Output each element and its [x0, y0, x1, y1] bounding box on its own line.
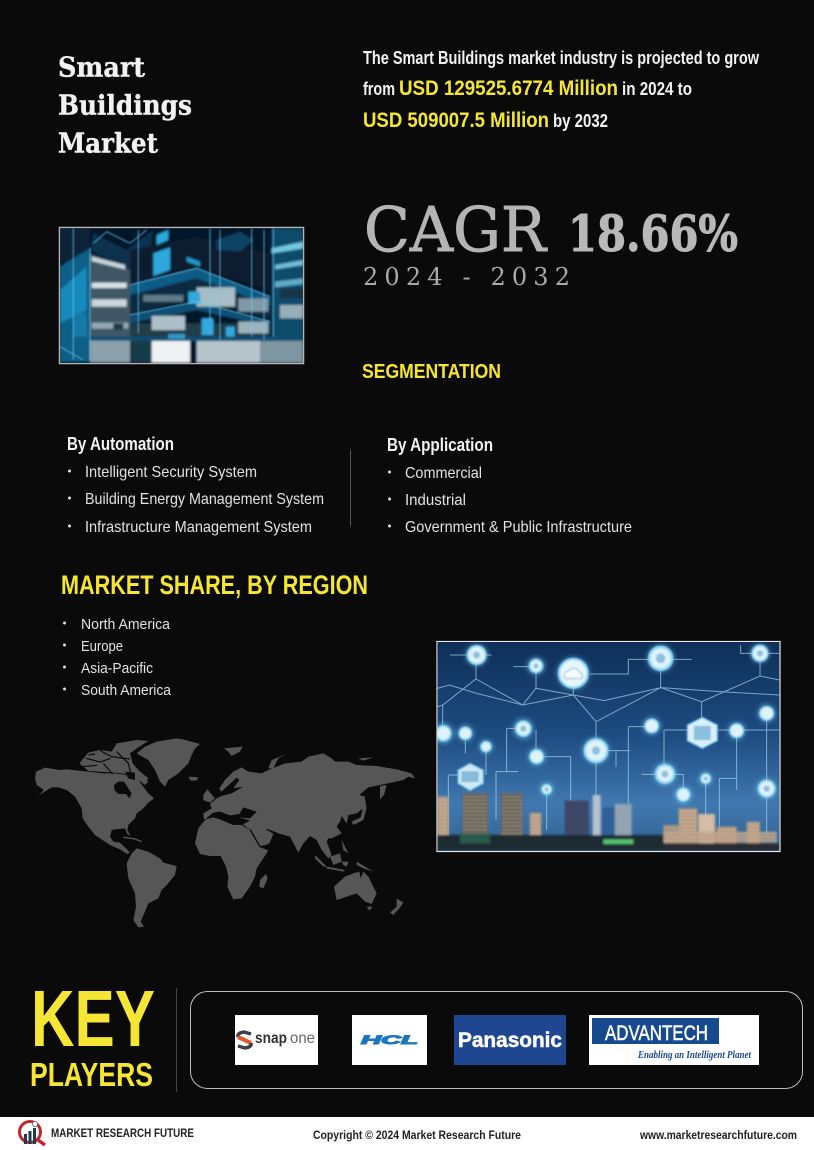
title: Smart	[58, 52, 145, 84]
region list	[63, 616, 172, 699]
heading: market share by region: MARKET SHARE, BY REGION	[61, 570, 368, 600]
CAGR figure	[363, 193, 738, 291]
segment list: by automation: Building Energy Management System	[85, 491, 324, 508]
image: smart building	[60, 228, 304, 364]
canadian arctic islands	[79, 740, 148, 783]
logo: snap one: snap	[255, 1030, 287, 1047]
heading: segmentation: SEGMENTATION	[362, 361, 501, 383]
south america	[127, 848, 177, 927]
africa	[195, 817, 268, 899]
region list: Europe	[81, 638, 123, 655]
caribbean islands	[123, 837, 142, 842]
CAGR figure: CAGR	[364, 193, 548, 266]
projection text block: in 2024 to	[622, 79, 692, 99]
asian islands	[203, 747, 403, 915]
CAGR figure: 18.66%	[568, 204, 738, 263]
key players heading: KEY	[31, 974, 155, 1063]
projection text block: from	[363, 79, 395, 99]
segment list: by automation: By Automation	[67, 434, 174, 454]
greenland	[137, 738, 200, 787]
logo: hcl: HCL	[361, 1035, 418, 1047]
logo: snap one: one	[290, 1030, 315, 1047]
segment list: by automation: Infrastructure Management System	[85, 519, 312, 536]
region list: North America	[81, 616, 171, 633]
logo: snap one	[235, 1015, 318, 1065]
footer copyright: Copyright © 2024 Market Research Future	[313, 1128, 521, 1142]
logo: advantech: Enabling an Intelligent Planet	[637, 1050, 752, 1061]
logo: panasonic	[454, 1015, 566, 1065]
footer brand: MARKET RESEARCH FUTURE	[51, 1126, 194, 1140]
mediterranean and black sea	[205, 807, 257, 825]
logo: panasonic: Panasonic	[458, 1029, 562, 1052]
arctic channels	[82, 751, 131, 774]
iceland	[188, 777, 198, 781]
segment list: by application: Commercial	[405, 465, 482, 482]
logo: advantech: ADVANTECH	[605, 1022, 708, 1045]
old world	[195, 747, 415, 915]
north america	[35, 768, 154, 854]
projection text block: USD 129525.6774 Million	[399, 77, 618, 100]
region list: South America	[81, 682, 172, 699]
key players heading	[30, 974, 155, 1093]
title: Buildings	[58, 90, 192, 122]
segment list: by automation	[67, 434, 324, 536]
projection text block	[363, 48, 760, 132]
projection text block: by 2032	[553, 111, 608, 131]
world map	[35, 738, 415, 927]
CAGR figure: 2024 - 2032	[363, 263, 570, 291]
hudson bay	[114, 772, 135, 798]
title	[58, 52, 192, 160]
footer bar	[0, 1117, 814, 1150]
segment list: by automation: Intelligent Security System	[85, 464, 257, 481]
segment list: by application: Industrial	[405, 492, 466, 509]
key players panel	[190, 992, 802, 1088]
segment list: by application	[387, 435, 632, 536]
logo: hcl	[352, 1015, 427, 1065]
title: Market	[58, 128, 158, 160]
logo: advantech	[589, 1015, 759, 1065]
key players heading: PLAYERS	[30, 1056, 153, 1093]
image: connected city network	[433, 642, 780, 852]
eurasia	[203, 753, 415, 858]
region list: Asia-Pacific	[81, 660, 153, 677]
footer logo icon	[20, 1122, 45, 1145]
segment list: by application: By Application	[387, 435, 493, 455]
baltic sea	[221, 778, 243, 796]
projection text block: USD 509007.5 Million	[363, 109, 549, 132]
red sea and gulf	[250, 829, 278, 847]
segment list: by application: Government & Public Infrastructure	[405, 519, 632, 536]
